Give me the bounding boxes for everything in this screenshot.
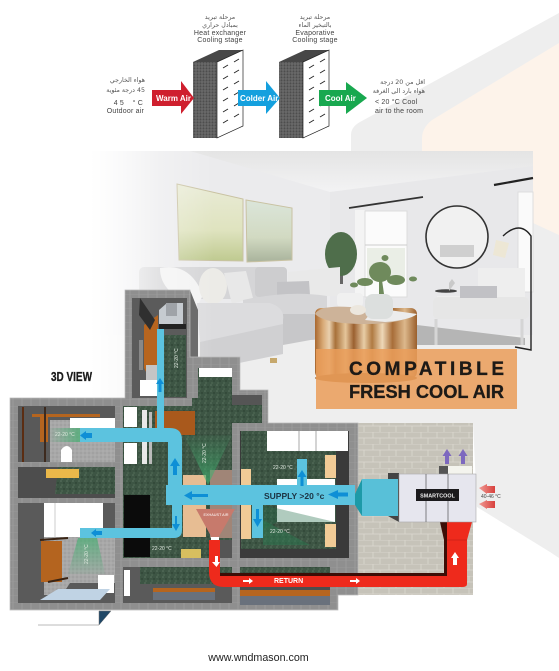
background shapes — [351, 13, 559, 558]
duct direction arrows — [80, 378, 348, 537]
3D view title: 3D VIEW — [51, 369, 93, 384]
outdoor air label: 45 درجة مئوية — [106, 87, 145, 94]
evaporative label: Cooling stage — [292, 37, 338, 44]
arrow: cool air — [319, 82, 367, 114]
room: top tower — [132, 298, 187, 398]
room air label — [373, 79, 425, 115]
intake temperature: 40-46 °C — [481, 494, 501, 500]
evaporative label: بالتبخير الماء — [298, 22, 332, 29]
evaporative panel — [279, 50, 329, 138]
outdoor air label: Outdoor air — [107, 108, 144, 115]
outdoor air label: هواء الخارجي — [110, 77, 145, 84]
evaporative label: مرحلة تبريد — [300, 14, 330, 21]
armchair and lamp — [433, 228, 531, 350]
temperature label: 22-20 °C — [174, 348, 180, 368]
return direction arrows — [212, 552, 459, 584]
outdoor air label: 4 5 ° C — [114, 99, 143, 107]
heat exchanger label: مرحلة تبريد — [205, 14, 235, 21]
return label: RETURN — [274, 578, 303, 585]
paved outdoor area — [356, 423, 473, 595]
room: lower left bedroom — [18, 503, 115, 603]
exhaust arrows: purple — [442, 449, 468, 464]
floor band — [417, 325, 525, 345]
heat exchanger panel — [193, 50, 243, 138]
banner: compatible fresh cool air — [316, 349, 517, 409]
heat exchanger label: Cooling stage — [197, 37, 243, 44]
floor plan — [10, 290, 501, 625]
smartcool unit — [355, 466, 476, 522]
evaporative label — [292, 14, 338, 44]
room: stair — [18, 467, 115, 498]
room air label: air to the room — [375, 108, 423, 115]
evaporative label: Evaporative — [295, 30, 335, 37]
room: right — [240, 431, 349, 558]
window — [349, 178, 533, 297]
living room photo — [90, 151, 533, 423]
intake arrows: red — [479, 484, 495, 509]
website: www.wndmason.com — [207, 652, 309, 664]
banner: compatible fresh cool air: FRESH COOL AIR — [349, 381, 504, 402]
room: lower right — [240, 567, 330, 605]
supply label: SUPPLY >20 °c — [264, 491, 325, 501]
walls — [190, 290, 198, 357]
process diagram: air cooling stages — [106, 14, 425, 138]
sofa — [139, 267, 363, 370]
room air label: < 20 °C Cool — [375, 98, 418, 106]
room: lower centre — [123, 567, 232, 603]
arrow: colder air: Colder Air — [240, 94, 278, 103]
banner: compatible fresh cool air: COMPATIBLE — [349, 359, 504, 380]
plant — [325, 232, 357, 284]
paintings — [177, 184, 292, 262]
arrow: cool air: Cool Air — [325, 94, 356, 103]
room: central living — [123, 368, 262, 558]
exhaust air cone — [196, 509, 235, 538]
arrow: warm air — [152, 81, 194, 114]
coffee table with vase — [315, 255, 417, 383]
mirror — [426, 206, 488, 268]
heat exchanger label: بمبادل حراري — [202, 22, 238, 29]
entrance step — [38, 611, 111, 625]
arrow: warm air: Warm Air — [156, 94, 191, 103]
room air label: اقل من 20 درجة — [380, 79, 425, 86]
smartcool unit: SMARTCOOL — [420, 494, 456, 500]
room: lower left bedroom: 22-20 °C — [84, 544, 90, 564]
room: central living: 22-20 °C — [202, 443, 208, 463]
room: right: 22-20 °C — [273, 465, 293, 471]
room: upper left — [18, 406, 115, 462]
room air label: هواء بارد الى الغرفة — [373, 88, 425, 95]
return duct — [209, 522, 472, 587]
heat exchanger label: Heat exchanger — [194, 30, 247, 37]
room: right: 22-20 °C — [270, 529, 290, 535]
supply ducts — [80, 329, 355, 538]
room: upper left: 22-20 °C — [55, 432, 75, 438]
outdoor air label — [106, 77, 145, 115]
arrow: colder air — [238, 81, 280, 114]
room: central living: 22-20 °C — [152, 546, 172, 552]
exhaust air cone: EXHAUST AIR — [203, 513, 229, 517]
heat exchanger label — [194, 14, 247, 44]
